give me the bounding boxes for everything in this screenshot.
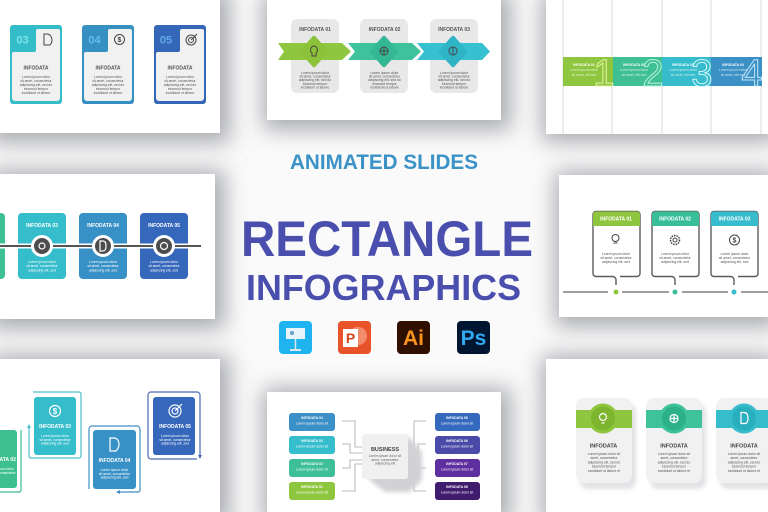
left boxes xyxy=(289,413,335,500)
card 04: incididunt ut labore xyxy=(94,91,122,95)
card teal: incididunt ut labore et xyxy=(658,469,690,473)
icon: Photoshop: Ps xyxy=(461,327,486,350)
card 04 xyxy=(79,213,127,279)
band labels: Lorem ipsum dolor xyxy=(570,68,599,72)
card 04: Lorem ipsum dolor xyxy=(94,75,123,79)
step 02: adipiscing elit, sed do xyxy=(368,78,401,82)
step 03: incididunt ut labore xyxy=(440,85,468,89)
business box xyxy=(362,434,408,479)
band labels: INFODATA 03 xyxy=(672,63,694,67)
business box: Lorem ipsum dolor sit xyxy=(369,454,401,458)
card cyan xyxy=(716,398,768,489)
card cyan: Lorem ipsum dolor sit xyxy=(728,452,760,456)
card 03: Lorem ipsum dolor xyxy=(41,434,70,438)
right boxes: Lorem ipsum dolor sit xyxy=(441,422,473,426)
callout 01: adipiscing elit, sed xyxy=(602,260,630,264)
band labels: sit amet, elit sed xyxy=(622,73,646,77)
panel: outlined callout cards xyxy=(555,171,768,327)
card teal xyxy=(646,398,706,489)
callout 02: Lorem ipsum dolor xyxy=(661,252,690,256)
card 04 xyxy=(89,426,140,494)
callout 01 xyxy=(593,212,640,285)
card 03: INFODATA 03 xyxy=(26,223,58,229)
step 03: sit amet, consectetur xyxy=(438,75,471,79)
left boxes: INFODATA 01 xyxy=(301,485,323,489)
card 03: sit amet, consectetur xyxy=(20,79,53,83)
card teal: amet, consectetur xyxy=(661,456,688,460)
callout 02: INFODATA 02 xyxy=(659,216,691,222)
card 04: Lorem ipsum dolor xyxy=(100,468,129,472)
card 04: $ xyxy=(118,37,122,44)
outlined numerals: 1 xyxy=(593,53,615,95)
panel: staggered cards with arrows xyxy=(0,355,230,512)
band labels: Lorem ipsum dolor xyxy=(719,68,748,72)
card 03: sit amet, consectetur xyxy=(26,264,59,268)
left boxes: INFODATA 02 xyxy=(301,462,323,466)
card 02 xyxy=(0,430,21,492)
card 05: Lorem ipsum dolor xyxy=(161,434,190,438)
card 03: INFODATA 03 xyxy=(39,424,71,430)
card teal: INFODATA xyxy=(660,444,688,450)
right boxes: Lorem ipsum dolor sit xyxy=(441,490,473,494)
left boxes: Lorem ipsum dolor sit xyxy=(296,490,328,494)
card 05: adipiscing elit, sed xyxy=(161,442,189,446)
step 01: sit amet, consectetur xyxy=(299,75,332,79)
card 05: adipiscing elit, sed xyxy=(150,268,178,272)
left boxes: Lorem ipsum dolor sit xyxy=(296,444,328,448)
card 04: adipiscing elit, sed do xyxy=(92,83,124,87)
left boxes: INFODATA 04 xyxy=(301,416,323,420)
card green: amet, consectetur xyxy=(591,456,618,460)
step 02: sit amet, consectetur xyxy=(369,75,401,79)
icon: Keynote xyxy=(279,321,312,354)
card 03: adipiscing elit, sed xyxy=(41,442,69,446)
step 01: adipiscing elit, sed do xyxy=(299,78,331,82)
band labels xyxy=(570,63,748,77)
card 04: adipiscing elit, sed xyxy=(89,268,117,272)
outlined numerals xyxy=(593,53,763,95)
title line 1: RECTANGLE xyxy=(241,211,533,267)
step 03: Lorem ipsum dolor xyxy=(440,71,469,75)
card green: eiusmod tempor xyxy=(592,465,617,469)
rail xyxy=(0,235,201,257)
card 05: sit amet, consectetur xyxy=(159,438,192,442)
card 03 xyxy=(10,25,62,104)
callout 01: Lorem ipsum dolor xyxy=(602,252,631,256)
callout 03: adipiscing elit, sed xyxy=(721,260,748,264)
step 03: eiusmod tempor xyxy=(442,82,467,86)
right boxes: INFODATA 05 xyxy=(446,416,468,420)
panel: numbered cards xyxy=(0,0,230,143)
card 04: 04 xyxy=(88,34,101,46)
icon: Illustrator: Ai xyxy=(403,327,424,350)
card 05: incididunt ut labore xyxy=(166,91,194,95)
panel: banded cards with circles xyxy=(542,355,768,512)
icon: Photoshop xyxy=(457,321,490,354)
step 02: INFODATA 02 xyxy=(369,27,401,33)
band labels: Lorem ipsum dolor xyxy=(669,68,698,72)
card teal: Lorem ipsum dolor sit xyxy=(658,452,690,456)
band labels: sit amet, elit sed xyxy=(572,73,596,77)
card teal: eiusmod tempor xyxy=(662,465,687,469)
card cyan: INFODATA xyxy=(730,444,758,450)
card green: adipiscing elit, sed do xyxy=(588,460,620,464)
long shadow xyxy=(368,436,422,492)
band labels: INFODATA 01 xyxy=(573,63,595,67)
card green xyxy=(576,398,636,489)
right boxes: INFODATA 08 xyxy=(446,485,468,489)
card 04: INFODATA 04 xyxy=(99,458,131,464)
card 05: INFODATA xyxy=(167,66,193,72)
card 03: Lorem ipsum dolor xyxy=(28,260,57,264)
step 02: Lorem ipsum dolor xyxy=(370,71,399,75)
step 02: incididunt ut labore xyxy=(370,85,399,89)
card teal: adipiscing elit, sed do xyxy=(658,460,690,464)
card 05: 05 xyxy=(160,34,172,46)
card 05: Lorem ipsum dolor xyxy=(166,75,195,79)
card 05: sit amet, consectetur xyxy=(164,79,197,83)
panel: arrow timeline xyxy=(263,0,511,130)
right boxes: INFODATA 06 xyxy=(446,439,468,443)
card 04: sit amet, consectetur xyxy=(87,264,120,268)
card 05: INFODATA 05 xyxy=(148,223,180,229)
step 01: incididunt ut labore xyxy=(301,85,329,89)
icon: PowerPoint: P xyxy=(346,330,355,346)
icon: PowerPoint xyxy=(338,321,371,354)
step 01: eiusmod tempor xyxy=(303,82,328,86)
card 04: eiusmod tempor xyxy=(96,87,121,91)
card green: Lorem ipsum dolor sit xyxy=(588,452,620,456)
callout 03: sit amet, consectetur xyxy=(719,256,751,260)
card green: incididunt ut labore et xyxy=(588,469,620,473)
band labels: Lorem ipsum dolor xyxy=(620,68,649,72)
left boxes: INFODATA 03 xyxy=(301,439,323,443)
callout 01: INFODATA 01 xyxy=(600,216,632,222)
card 05: INFODATA 05 xyxy=(159,424,191,430)
band labels: sit amet, elit sed xyxy=(721,73,745,77)
card 03: $ xyxy=(53,407,58,416)
panel: rail with coloured cards xyxy=(0,170,225,329)
card 05: Lorem ipsum dolor xyxy=(150,260,179,264)
callout 03 xyxy=(711,212,758,285)
step 02: eiusmod tempor xyxy=(372,82,398,86)
outlined numerals: 4 xyxy=(741,53,763,95)
callout 01: sit amet, consectetur xyxy=(600,256,633,260)
subtitle: ANIMATED SLIDES xyxy=(290,150,478,174)
outlined numerals: 3 xyxy=(691,53,713,95)
card 03: sit amet, consectetur xyxy=(39,438,72,442)
business box: amet, consectetur xyxy=(372,458,399,462)
step 03 xyxy=(417,19,490,93)
card 03: adipiscing elit, sed xyxy=(28,268,56,272)
card 03 xyxy=(27,392,81,458)
card 04: sit amet, consectetur xyxy=(99,472,131,476)
card 05 xyxy=(140,213,188,279)
card green: INFODATA xyxy=(590,444,617,450)
step 02 xyxy=(348,19,421,93)
callout 03: $ xyxy=(733,238,737,244)
step 01: INFODATA 01 xyxy=(299,27,331,33)
card 04: sit amet, consectetur xyxy=(92,79,125,83)
card 05 xyxy=(154,25,206,104)
card 03: Lorem ipsum dolor xyxy=(22,75,51,79)
card 05: adipiscing elit, sed do xyxy=(164,83,196,87)
right boxes: INFODATA 07 xyxy=(446,462,468,466)
card 04: INFODATA xyxy=(95,66,121,72)
panel: folded columns with numerals xyxy=(542,0,768,142)
card 04: adipiscing elit, sed xyxy=(101,476,128,480)
card 04: INFODATA 04 xyxy=(87,223,119,229)
card cyan: amet, consectetur xyxy=(731,456,758,460)
panel: business hub diagram xyxy=(263,388,511,512)
connector lines xyxy=(342,421,426,491)
step 03: INFODATA 03 xyxy=(438,27,470,33)
callout 02: adipiscing elit, sed xyxy=(661,260,689,264)
card 03 xyxy=(18,213,66,279)
right boxes xyxy=(435,413,480,500)
business box: adipiscing elit xyxy=(375,462,395,466)
callout 03: Lorem ipsum dolor xyxy=(720,252,749,256)
band labels: INFODATA 04 xyxy=(722,63,744,67)
callout 03: INFODATA 03 xyxy=(719,216,751,222)
title line 2: INFOGRAPHICS xyxy=(246,267,521,308)
right boxes: Lorem ipsum dolor sit xyxy=(441,468,473,472)
card 05: sit amet, consectetur xyxy=(148,264,181,268)
left boxes: Lorem ipsum dolor sit xyxy=(296,468,328,472)
right boxes: Lorem ipsum dolor sit xyxy=(441,444,473,448)
card 03: eiusmod tempor xyxy=(24,87,49,91)
business box: BUSINESS xyxy=(371,447,399,453)
step 03: adipiscing elit, sed do xyxy=(438,78,470,82)
card 05 xyxy=(148,392,202,459)
outlined numerals: 2 xyxy=(642,53,664,95)
card 04 xyxy=(82,25,134,104)
icon: Illustrator xyxy=(397,321,430,354)
card cyan: eiusmod tempor xyxy=(732,465,757,469)
card cyan: adipiscing elit, sed do xyxy=(728,460,760,464)
step 01: Lorem ipsum dolor xyxy=(301,71,330,75)
card 03: INFODATA xyxy=(23,66,49,72)
callout 02: sit amet, consectetur xyxy=(659,256,692,260)
card 03: 03 xyxy=(16,34,29,46)
callout 02 xyxy=(652,212,699,285)
card 03: adipiscing elit, sed do xyxy=(20,83,52,87)
timeline xyxy=(563,290,768,294)
band labels: INFODATA 02 xyxy=(623,63,645,67)
card 04: Lorem ipsum dolor xyxy=(89,260,118,264)
left boxes: Lorem ipsum dolor sit xyxy=(296,422,328,426)
card 05: eiusmod tempor xyxy=(168,87,193,91)
card 03: incididunt ut labore xyxy=(22,91,50,95)
step 01 xyxy=(278,19,351,93)
band labels: sit amet, elit sed xyxy=(671,73,695,77)
card cyan: incididunt ut labore et xyxy=(728,469,760,473)
